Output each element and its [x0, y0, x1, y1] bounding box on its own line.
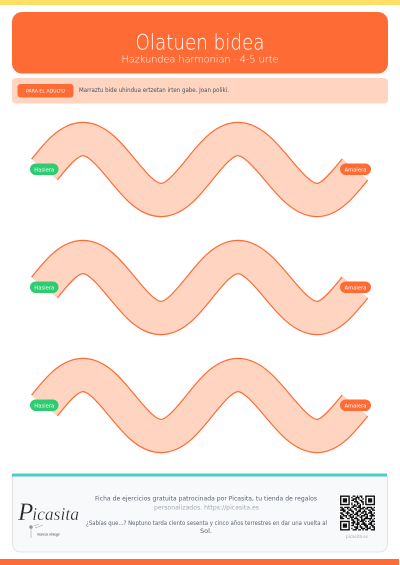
end label: Amaiera: [344, 285, 366, 291]
sponsor link: personalizados. https://picasita.es: [154, 504, 259, 511]
header panel: [12, 12, 388, 74]
subtitle: Hazkundea harmonian · 4-5 urte: [122, 54, 278, 66]
title: Olatuen bidea: [136, 30, 264, 56]
top yellow bar: [0, 0, 400, 5]
start label: Hasiera: [34, 285, 54, 291]
footer panel: [12, 474, 388, 552]
logo: Picasita: marcas vintage: [37, 532, 60, 536]
wave path 3: [30, 375, 371, 436]
QR caption: picasita.es: [346, 534, 369, 540]
end label: [340, 400, 371, 411]
start label: [30, 282, 58, 293]
fun fact: ¿Sabías que...? Neptuno tarda ciento sesenta y cinco años terrestres en dar una vuelta al: [86, 520, 327, 527]
wave path 2: [30, 257, 371, 318]
bottom orange bar: [0, 559, 399, 565]
QR code: [339, 495, 376, 531]
start label: [30, 164, 58, 175]
instruction text: Marraztu bide uhindua ertzetan irten gabe. Joan poliki.: [79, 88, 229, 94]
start label: Hasiera: [34, 167, 54, 173]
wave path 1: [30, 139, 371, 200]
badge: para el adulto: [18, 84, 74, 98]
logo: Picasita: [17, 499, 79, 538]
fun fact: [86, 520, 327, 535]
badge: para el adulto: PARA EL ADULTO: [26, 89, 65, 95]
fun fact: Sol.: [200, 529, 212, 535]
sponsor text: Ficha de ejercicios gratuita patrocinada por Picasita, tu tienda de regalos: [95, 496, 317, 502]
adult instruction panel: [12, 78, 388, 104]
icon: dandelion flower: [29, 524, 43, 538]
start label: Hasiera: [34, 403, 54, 409]
end label: Amaiera: [344, 167, 366, 173]
start label: [30, 400, 58, 411]
end label: Amaiera: [344, 403, 366, 409]
end label: [340, 282, 371, 293]
end label: [340, 164, 371, 175]
logo: Picasita: Picasita: [17, 499, 79, 526]
